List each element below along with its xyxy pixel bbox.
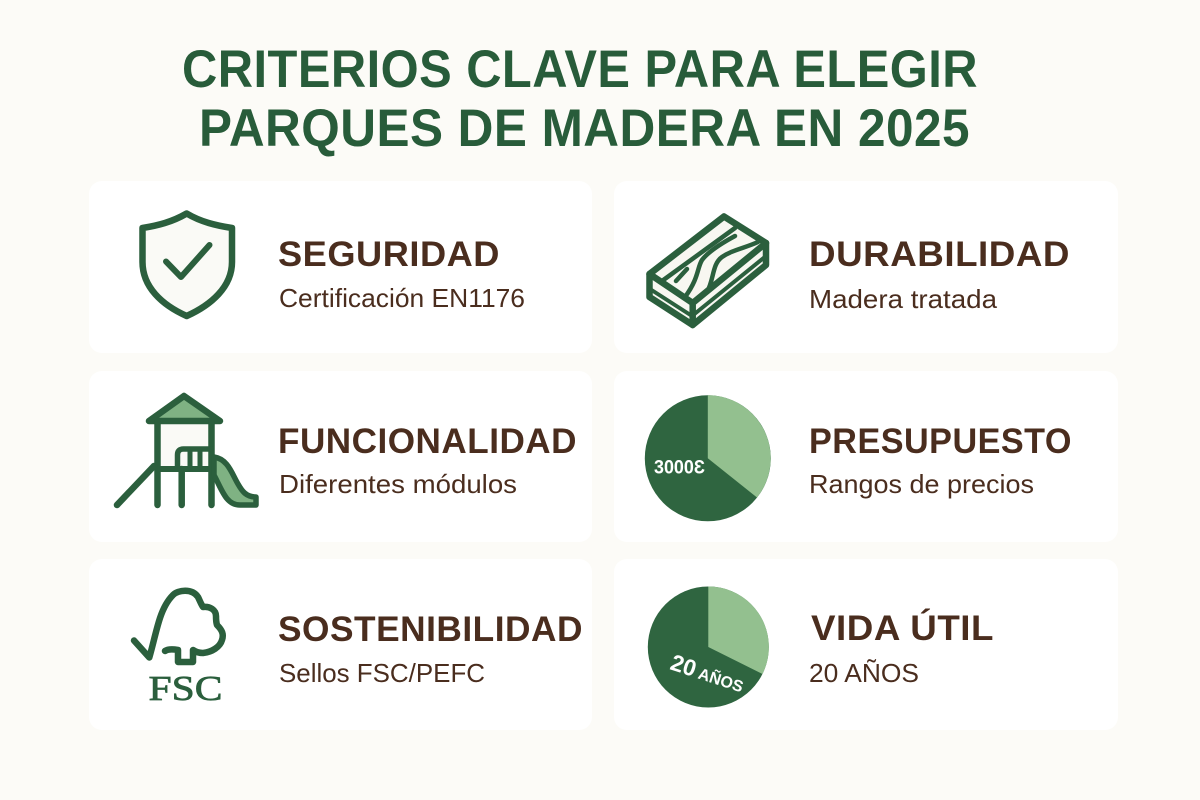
text: madera tratada: Madera tratada [809,284,998,314]
chart: budget pie: 3000Ɛ [654,458,705,478]
heading: funcionalidad: FUNCIONALIDAD [278,422,577,461]
panel: funcionalidad [89,371,592,542]
icon: FSC tree logo [134,591,223,708]
heading: seguridad: SEGURIDAD [278,235,500,274]
icon: FSC tree logo: FSC [148,669,222,708]
icon: playground tower [117,396,256,505]
icon: wood plank [650,216,766,325]
text: certificación: Certificación EN1176 [279,283,525,313]
text: diferentes módulos: Diferentes módulos [279,469,517,499]
panel: durabilidad [614,181,1118,353]
panel: sostenibilidad [89,559,592,730]
icon: shield with check [142,214,232,316]
text: rangos de precios: Rangos de precios [809,469,1034,499]
panel: seguridad [89,181,592,353]
title: PARQUES DE MADERA EN 2025 [199,99,970,158]
heading: sostenibilidad: SOSTENIBILIDAD [278,610,583,649]
panel: presupuesto [614,371,1118,542]
heading: durabilidad: DURABILIDAD [809,235,1070,274]
chart: budget pie [645,395,771,521]
chart: lifespan pie: 20AÑOS [667,649,748,697]
heading: presupuesto: PRESUPUESTO [809,422,1072,461]
title: CRITERIOS CLAVE PARA ELEGIR [182,40,978,99]
heading: vida útil: VIDA ÚTIL [811,608,994,648]
title [182,40,978,158]
text: 20 años: 20 AÑOS [809,658,919,688]
panel: vida útil [614,559,1118,730]
text: sellos: Sellos FSC/PEFC [279,658,485,688]
chart: lifespan pie [648,586,769,708]
